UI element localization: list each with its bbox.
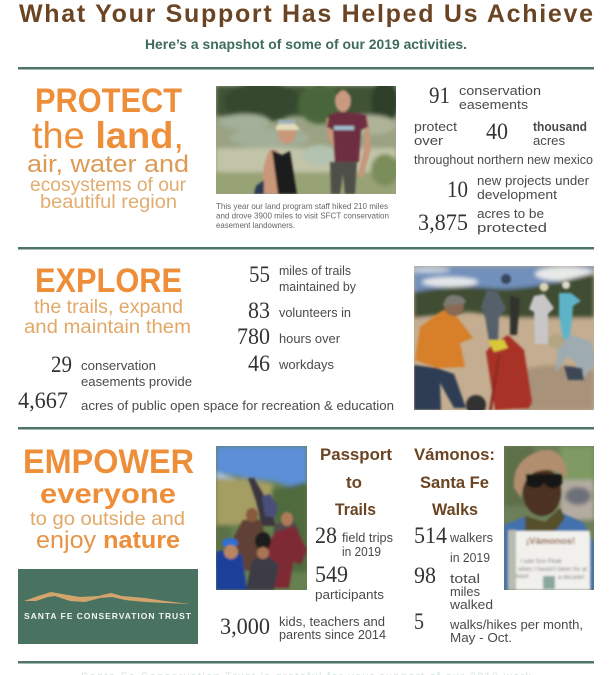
- heading: protect: ecosystems of our: [30, 175, 187, 196]
- stats: passport to trails: participants: [315, 587, 385, 602]
- stat: protect over 40 thousand acres: [414, 119, 593, 167]
- stat: 10 new projects: development: [477, 187, 557, 202]
- title: What Your Support Has Helped Us Achieve: [19, 0, 593, 28]
- stat: 10 new projects: [447, 173, 590, 202]
- stats: vamonos santa fe walks: May - Oct.: [450, 630, 512, 645]
- stats: trails maintained: 83: [248, 298, 270, 323]
- stats: public open space: 4,667: [18, 388, 68, 413]
- stat: protect over 40 thousand acres: acres: [533, 133, 565, 148]
- stat: protect over 40 thousand acres: throughout northern new mexico: [414, 152, 593, 167]
- stat: 91 conservation easements: easements: [459, 97, 529, 112]
- heading: protect: [27, 82, 189, 213]
- photo caption: [216, 202, 389, 230]
- stats: passport to trails: parents since 2014: [279, 627, 386, 642]
- logo: santa fe conservation trust: [18, 569, 198, 644]
- stats: public open space: conservation: [81, 358, 156, 373]
- photo: kids on a trail: [216, 446, 307, 590]
- heading: empower: everyone: [40, 478, 176, 509]
- heading: protect: air, water and: [27, 151, 189, 178]
- stats: passport to trails: 28: [315, 523, 337, 548]
- photo: vamonos walker holding sign: least: [516, 574, 529, 580]
- stats: trails maintained: hours over: [279, 331, 341, 346]
- stats: trails maintained: 780: [237, 324, 270, 349]
- icon: mountain ridge: [24, 592, 191, 604]
- heading: empower: [23, 443, 194, 554]
- stats: vamonos santa fe walks: 514: [414, 523, 447, 548]
- stat: 10 new projects: 10: [447, 177, 468, 202]
- heading: empower: EMPOWER: [23, 443, 194, 481]
- stats: trails maintained: workdays: [278, 357, 334, 372]
- stat: 10 new projects: new projects under: [477, 173, 590, 188]
- stats: passport to trails: field trips: [342, 530, 393, 545]
- photo: vamonos walker holding sign: when I haven't been for at: [517, 567, 587, 573]
- stat: 91 conservation easements: 91: [429, 83, 450, 108]
- stats: vamonos santa fe walks: 98: [414, 563, 436, 588]
- photo: two land program staff hiking: [216, 80, 399, 194]
- stat: protect over 40 thousand acres: over: [414, 133, 444, 148]
- stats: passport to trails: Trails: [335, 501, 376, 519]
- stats: passport to trails: Passport: [320, 446, 393, 464]
- panel: explore: [18, 262, 597, 415]
- photo: vamonos walker holding sign: a decade!: [558, 575, 585, 581]
- photo caption: and drove 3900 miles to visit SFCT conservation: [216, 212, 389, 220]
- stats: passport to trails: 549: [315, 562, 348, 587]
- stat: 3,875 acres: [418, 206, 547, 235]
- photo caption: This year our land program staff hiked 210 miles: [216, 202, 388, 211]
- stats: vamonos santa fe walks: walked: [449, 597, 493, 612]
- stats: public open space: acres of public open space for recreation & education: [81, 398, 394, 413]
- stats: vamonos santa fe walks: total: [450, 571, 480, 586]
- stat: 3,875 acres: protected: [477, 220, 547, 235]
- stats: vamonos santa fe walks: miles: [450, 584, 480, 599]
- heading: explore: and maintain them: [24, 317, 191, 338]
- subtitle: Here’s a snapshot of some of our 2019 activities.: [145, 37, 467, 52]
- stats: trails maintained: miles of trails: [279, 263, 351, 278]
- stats: passport to trails: [220, 446, 393, 642]
- stat: 3,875 acres: acres to be: [477, 206, 544, 221]
- heading: explore: [24, 262, 191, 338]
- photo: vamonos walker holding sign: ¡Vámonos!: [526, 536, 575, 547]
- stats: vamonos santa fe walks: Walks: [432, 501, 478, 519]
- logo: santa fe conservation trust: SANTA FE CONSERVATION TRUST: [24, 611, 192, 621]
- panel: protect: [27, 80, 593, 235]
- stats: passport to trails: in 2019: [342, 544, 381, 559]
- stats: vamonos santa fe walks: [414, 446, 583, 645]
- stats: public open space: easements provide: [81, 374, 192, 389]
- stat: 91 conservation easements: [429, 83, 541, 112]
- stats: vamonos santa fe walks: walks/hikes per month,: [449, 617, 583, 632]
- photo: volunteers maintaining trail with wheelbarrow: [410, 266, 597, 415]
- stats: public open space: 29: [51, 352, 72, 377]
- stat: protect over 40 thousand acres: thousand: [533, 119, 587, 134]
- stats: trails maintained: maintained by: [279, 279, 356, 294]
- photo: vamonos walker holding sign: [504, 446, 594, 590]
- photo caption: easement landowners.: [216, 221, 295, 230]
- stats: vamonos santa fe walks: 5: [414, 609, 424, 634]
- photo: vamonos walker holding sign: I saw Sun Peak: [520, 559, 563, 565]
- heading: explore: the trails, expand: [34, 297, 183, 318]
- heading: protect: the land,: [32, 115, 184, 156]
- heading: protect: beautiful region: [40, 192, 177, 213]
- stats: trails maintained: volunteers in: [279, 305, 351, 320]
- stats: trails maintained: [237, 262, 356, 376]
- stat: 91 conservation easements: conservation: [459, 83, 541, 98]
- heading: empower: enjoy nature: [36, 527, 180, 554]
- stats: trails maintained: 55: [249, 262, 270, 287]
- stats: passport to trails: 3,000: [220, 614, 270, 639]
- stat: protect over 40 thousand acres: 40: [486, 119, 508, 144]
- heading: explore: EXPLORE: [35, 262, 182, 300]
- stats: trails maintained: 46: [248, 351, 270, 376]
- panel: empower: [18, 443, 594, 645]
- stats: vamonos santa fe walks: Santa Fe: [420, 474, 489, 492]
- stats: passport to trails: kids, teachers and: [279, 614, 385, 629]
- stat: 3,875 acres: 3,875: [418, 210, 468, 235]
- stats: passport to trails: to: [346, 474, 362, 492]
- heading: empower: to go outside and: [30, 509, 185, 530]
- heading: protect: PROTECT: [35, 82, 182, 120]
- stats: vamonos santa fe walks: in 2019: [450, 550, 490, 565]
- stat: protect over 40 thousand acres: protect: [414, 119, 457, 134]
- stats: vamonos santa fe walks: walkers: [449, 530, 493, 545]
- stats: public open space: [18, 352, 394, 413]
- stats: vamonos santa fe walks: Vámonos:: [414, 446, 495, 464]
